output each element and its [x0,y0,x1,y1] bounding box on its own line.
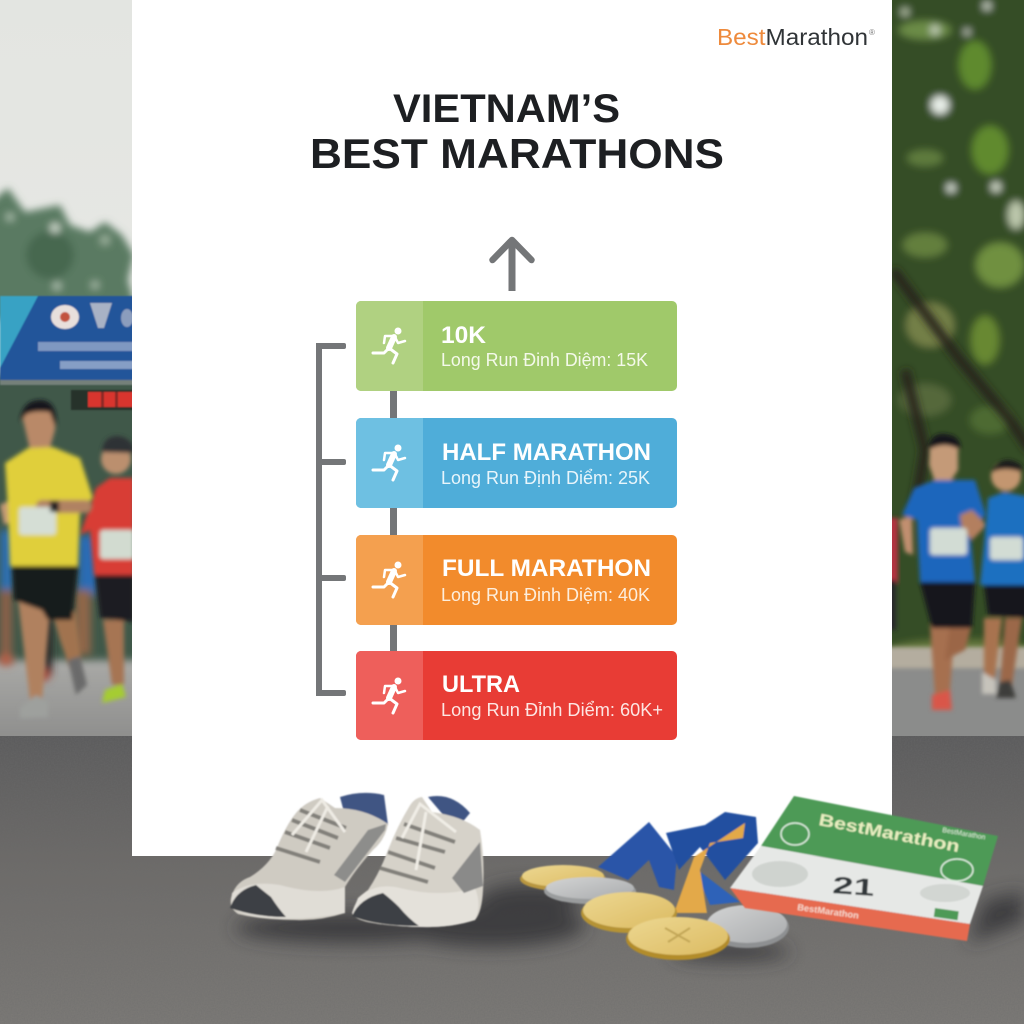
tree trunks [893,270,1024,510]
icon: runner [373,678,405,713]
icon: runner [373,562,405,597]
bracket connector [316,343,346,696]
medals and ribbons [520,812,789,960]
silver medal back [544,877,636,904]
bar: ultra: ULTRA [442,671,520,698]
bar: ultra: Long Run Đỉnh Diểm: 60K+ [441,700,663,720]
icon: runner [373,444,405,480]
background: right park scene [870,0,1024,748]
start banner [0,296,134,385]
bar: half marathon: Long Run Định Diểm: 25K [441,468,650,488]
bar: half marathon: HALF MARATHON [442,439,651,466]
race bib [730,796,998,941]
bar: 10K: Long Run Đinh Diệm: 15K [441,350,648,370]
race bib: BestMarathon [817,810,961,856]
bar: full marathon: FULL MARATHON [442,555,651,582]
blurred trees left [0,188,140,320]
bar: full marathon: Long Run Đinh Diệm: 40K [441,585,650,605]
running shoes [230,793,484,927]
right shoe [352,796,484,927]
far runner at edge [885,518,898,630]
sidewalk and road [880,647,1024,748]
icon: runner [373,328,405,363]
bar: 10K [356,301,677,391]
arrow up [492,240,532,291]
ground shadows under objects [235,884,1024,961]
blurred foliage [870,0,1024,670]
dark trees behind banner [0,375,160,675]
gold medal front [626,917,730,960]
gold medal top [520,865,606,891]
bar: 10K: 10K [441,322,487,349]
LED timer [71,390,134,410]
silver medal front [705,905,789,948]
left shoe [230,793,388,920]
runner in yellow shirt [0,400,93,718]
bar: half marathon [356,418,677,508]
race bib: 21 [832,872,875,902]
title: VIETNAM’S [393,87,620,131]
bar: ultra [356,651,677,740]
asphalt ground [0,736,1024,1024]
bar: full marathon [356,535,677,625]
white center panel [132,0,892,856]
race bib: BestMarathon [942,827,986,842]
brand logo: ® [869,28,875,37]
background runners blurred [0,530,98,681]
background: left race scene [0,0,160,750]
title: BEST MARATHONS [310,130,724,177]
runner 1 in blue [899,434,987,710]
race bib: BestMarathon [797,902,860,921]
brand logo: BestMarathon [717,24,868,50]
title [310,87,724,177]
blue ribbons [598,812,758,913]
runner 2 in blue [980,460,1024,698]
gold medal middle [581,892,677,933]
vertical connector between bars [390,390,397,651]
runner in red shirt [80,436,134,703]
